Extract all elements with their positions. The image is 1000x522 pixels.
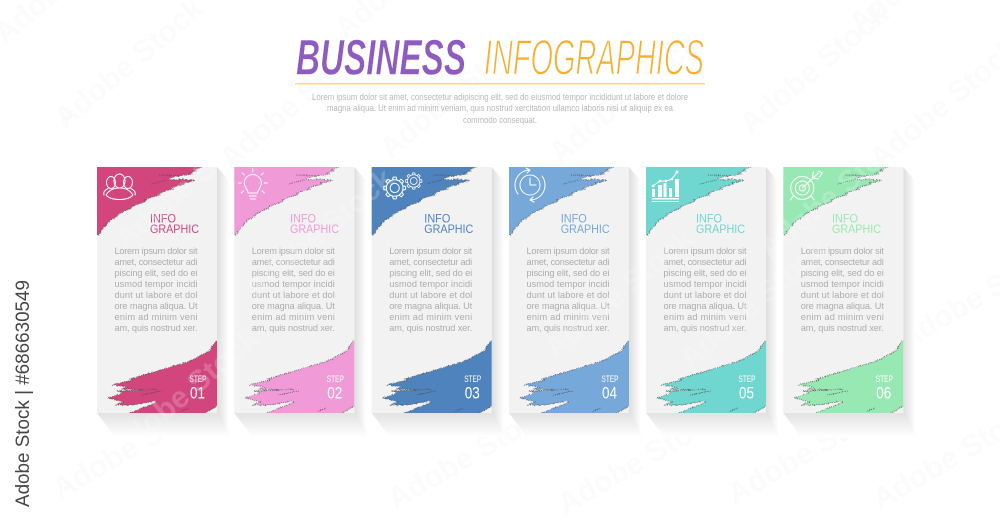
watermark: faint overlay on cards xyxy=(103,112,915,465)
panel: step 03 xyxy=(372,167,492,413)
body text: Lorem ipsum dolor sit xyxy=(526,246,610,256)
body text: dunt ut labore et dol xyxy=(664,290,746,300)
step label: 03 xyxy=(465,384,480,402)
watermark: faint overlay on cards: Adobe Stock xyxy=(238,162,400,305)
body text: ore magna aliqua. Ut xyxy=(526,301,610,311)
title xyxy=(296,30,704,86)
body text: usmod tempor incidi xyxy=(252,279,335,289)
info heading: GRAPHIC xyxy=(424,222,474,236)
step label xyxy=(602,374,618,402)
panel: step 05 xyxy=(646,167,766,413)
body text: usmod tempor incidi xyxy=(389,279,472,289)
body text: ore magna aliqua. Ut xyxy=(801,301,884,311)
info heading: INFO xyxy=(696,211,722,225)
icon: gears xyxy=(384,173,422,199)
body text: enim ad minim veni xyxy=(526,312,610,322)
body text: amet, consectetur adi xyxy=(114,257,198,267)
icon: clock cycle xyxy=(515,168,545,202)
body text: enim ad minim veni xyxy=(114,312,198,322)
body text: piscing elit, sed do ei xyxy=(801,268,884,278)
body text: amet, consectetur adi xyxy=(252,257,335,267)
subtitle text block xyxy=(312,92,688,125)
body text: Lorem ipsum dolor sit xyxy=(114,246,198,256)
body text: usmod tempor incidi xyxy=(801,279,884,289)
body text: amet, consectetur adi xyxy=(664,257,746,267)
subtitle text block: Lorem ipsum dolor sit amet, consectetur adipiscing elit, sed do eiusmod tempor incididunt ut labore et dolore xyxy=(312,92,688,102)
body text: Lorem ipsum dolor sit xyxy=(252,246,335,256)
info heading: GRAPHIC xyxy=(150,222,199,236)
info heading: INFO xyxy=(561,211,587,225)
info heading xyxy=(832,211,881,236)
watermark: faint overlay on cards: Adobe Stock xyxy=(538,222,700,365)
title: INFOGRAPHICS xyxy=(484,30,704,86)
subtitle text block: commodo consequat. xyxy=(463,115,537,125)
info heading: GRAPHIC xyxy=(290,222,339,236)
body text: enim ad minim veni xyxy=(801,312,884,322)
body text: Lorem ipsum dolor sit xyxy=(389,246,473,256)
body text: piscing elit, sed do ei xyxy=(526,268,610,278)
subtitle text block: magna aliqua. Ut enim ad minim veniam, quis nostrud xercitation ullamco laboris nisi ut aliquip ex ea xyxy=(327,103,673,113)
watermark: faint Adobe Stock background: Adobe Stock xyxy=(733,0,895,140)
watermark: faint overlay on cards: Adobe Stock xyxy=(108,112,270,255)
info heading: INFO xyxy=(290,211,316,225)
icon: bar chart xyxy=(652,170,679,202)
panel: step 04 xyxy=(509,167,629,413)
info heading: GRAPHIC xyxy=(832,222,881,236)
step label: STEP xyxy=(464,374,481,385)
watermark: faint Adobe Stock background: Adobe Stock xyxy=(373,22,535,165)
icon: light bulb xyxy=(238,169,267,199)
info heading xyxy=(424,211,474,236)
body text: ore magna aliqua. Ut xyxy=(114,301,198,311)
body text: piscing elit, sed do ei xyxy=(252,268,335,278)
body text: ore magna aliqua. Ut xyxy=(664,301,747,311)
body text: Lorem ipsum dolor sit xyxy=(801,246,884,256)
title: BUSINESS xyxy=(296,30,466,86)
step label: STEP xyxy=(738,374,756,385)
panel: step 06 xyxy=(783,167,904,413)
body text: usmod tempor incidi xyxy=(664,279,746,289)
title underline xyxy=(295,83,705,84)
body text: am, quis nostrud xer. xyxy=(389,323,472,333)
body text: enim ad minim veni xyxy=(252,312,335,322)
step label xyxy=(876,374,893,402)
body text: piscing elit, sed do ei xyxy=(114,268,198,278)
panel: step 01 xyxy=(97,167,217,413)
body text: enim ad minim veni xyxy=(389,312,472,322)
card shadows xyxy=(97,167,917,437)
body text xyxy=(114,246,198,333)
step label: 05 xyxy=(739,384,754,402)
icon: people xyxy=(104,174,135,200)
watermark: faint overlay on cards: Adobe Stock xyxy=(753,122,915,265)
body text: usmod tempor incidi xyxy=(114,279,198,289)
info heading: INFO xyxy=(150,211,176,225)
body text: am, quis nostrud xer. xyxy=(114,323,198,333)
step label: STEP xyxy=(876,374,893,385)
body text: am, quis nostrud xer. xyxy=(801,323,884,333)
step label: 04 xyxy=(602,384,617,402)
body text: piscing elit, sed do ei xyxy=(389,268,472,278)
body text: usmod tempor incidi xyxy=(526,279,610,289)
body text: enim ad minim veni xyxy=(664,312,746,322)
body text: dunt ut labore et dol xyxy=(526,290,610,300)
info heading: GRAPHIC xyxy=(696,222,745,236)
step label xyxy=(190,374,206,402)
info heading xyxy=(561,211,610,236)
body text xyxy=(801,246,884,333)
step label: STEP xyxy=(327,374,344,385)
body text: dunt ut labore et dol xyxy=(389,290,472,300)
watermark: faint Adobe Stock background: Adobe Stock xyxy=(552,401,728,521)
body text: amet, consectetur adi xyxy=(801,257,884,267)
body text: am, quis nostrud xer. xyxy=(526,323,610,333)
step label: STEP xyxy=(602,374,618,385)
body text xyxy=(526,246,610,333)
info heading: INFO xyxy=(424,211,450,225)
body text xyxy=(389,246,473,333)
watermark: faint Adobe Stock background: Adobe Stock xyxy=(543,27,705,170)
info heading: INFO xyxy=(832,211,858,225)
watermark: faint overlay on cards: Adobe Stock xyxy=(673,232,835,375)
stock id vertical label: Adobe Stock | #686630549 xyxy=(13,280,34,507)
body text xyxy=(664,246,747,333)
body text xyxy=(252,246,335,333)
step label xyxy=(738,374,756,402)
watermark: faint Adobe Stock background: Adobe Stock xyxy=(722,391,898,511)
body text: amet, consectetur adi xyxy=(526,257,610,267)
icon: target xyxy=(790,171,822,200)
watermark: faint Adobe Stock background: Adobe Stock xyxy=(382,396,558,516)
body text: am, quis nostrud xer. xyxy=(664,323,746,333)
info heading: GRAPHIC xyxy=(561,222,610,236)
panel: step 02 xyxy=(234,167,354,413)
step label: 02 xyxy=(327,384,342,402)
info heading xyxy=(696,211,745,236)
body text: amet, consectetur adi xyxy=(389,257,472,267)
step label: 01 xyxy=(190,384,205,402)
info heading xyxy=(290,211,339,236)
info heading xyxy=(150,211,199,236)
body text: dunt ut labore et dol xyxy=(114,290,198,300)
step label xyxy=(327,374,344,402)
watermark: faint Adobe Stock background: Adobe Stock xyxy=(213,32,375,175)
watermark: faint overlay on cards: Adobe Stock xyxy=(103,322,265,465)
body text: Lorem ipsum dolor sit xyxy=(664,246,747,256)
step label: 06 xyxy=(876,384,891,402)
step label: STEP xyxy=(190,374,206,385)
body text: dunt ut labore et dol xyxy=(252,290,335,300)
body text: piscing elit, sed do ei xyxy=(664,268,746,278)
step label xyxy=(464,374,481,402)
body text: dunt ut labore et dol xyxy=(801,290,884,300)
body text: ore magna aliqua. Ut xyxy=(252,301,335,311)
watermark: faint Adobe Stock background: Adobe Stock xyxy=(47,386,223,506)
body text: ore magna aliqua. Ut xyxy=(389,301,473,311)
body text: am, quis nostrud xer. xyxy=(252,323,335,333)
